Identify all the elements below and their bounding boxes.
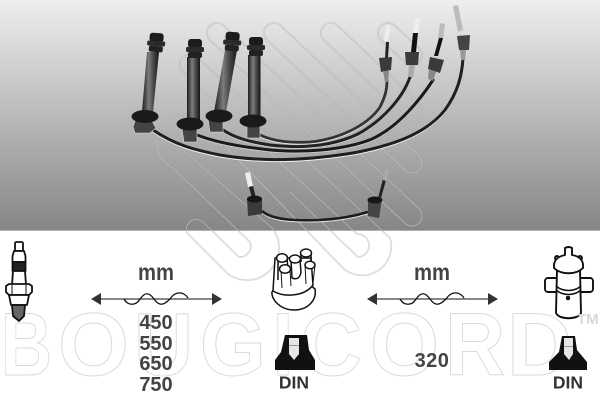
watermark: BOUGICORD wordmark: I <box>273 294 293 394</box>
trademark mark: TM <box>577 311 599 328</box>
watermark: BOUGICORD wordmark: G <box>200 294 266 394</box>
plug 2 <box>176 39 204 142</box>
watermark: BOUGICORD wordmark: D <box>507 294 572 394</box>
photo: short lead <box>245 169 389 222</box>
long wires <box>153 58 463 161</box>
dimension arrow: spark plug leads <box>91 293 222 305</box>
watermark: BOUGICORD wordmark: U <box>134 294 193 394</box>
icon: ignition coil <box>545 247 593 318</box>
icon: distributor cap <box>272 249 315 310</box>
watermark: BOUGICORD wordmark: B <box>1 294 52 394</box>
watermark: BOUGICORD wordmark: O <box>58 294 129 394</box>
icon: DIN connector, distributor side <box>275 335 315 370</box>
heading: mm, coil lead: mm <box>414 259 450 285</box>
dimension arrow: coil lead <box>367 293 498 305</box>
icon: spark plug <box>6 242 32 321</box>
lengths list: 450 <box>139 312 173 334</box>
plug 3 <box>206 31 242 132</box>
icon: DIN connector, coil side <box>549 336 587 370</box>
watermark: BOUGICORD wordmark: O <box>370 294 439 394</box>
plug 4 <box>240 37 266 138</box>
lengths list <box>139 312 173 396</box>
watermark: BOUGICORD wordmark: C <box>300 294 362 394</box>
coil terminals <box>379 5 470 82</box>
photo: ignition lead set <box>132 5 470 161</box>
lengths list: 750 <box>139 374 173 396</box>
watermark: BOUGICORD wordmark: R <box>445 294 505 394</box>
lengths list: 650 <box>139 353 173 375</box>
watermark: logo stripes <box>157 23 422 280</box>
heading: mm, spark plug leads: mm <box>138 259 174 285</box>
length value: 320 <box>415 350 449 372</box>
label: DIN, coil side: DIN <box>553 372 583 392</box>
plug 1 <box>132 32 166 133</box>
lengths list: 550 <box>139 333 173 355</box>
label: DIN, distributor side: DIN <box>279 372 309 392</box>
photo panel background <box>0 0 600 230</box>
